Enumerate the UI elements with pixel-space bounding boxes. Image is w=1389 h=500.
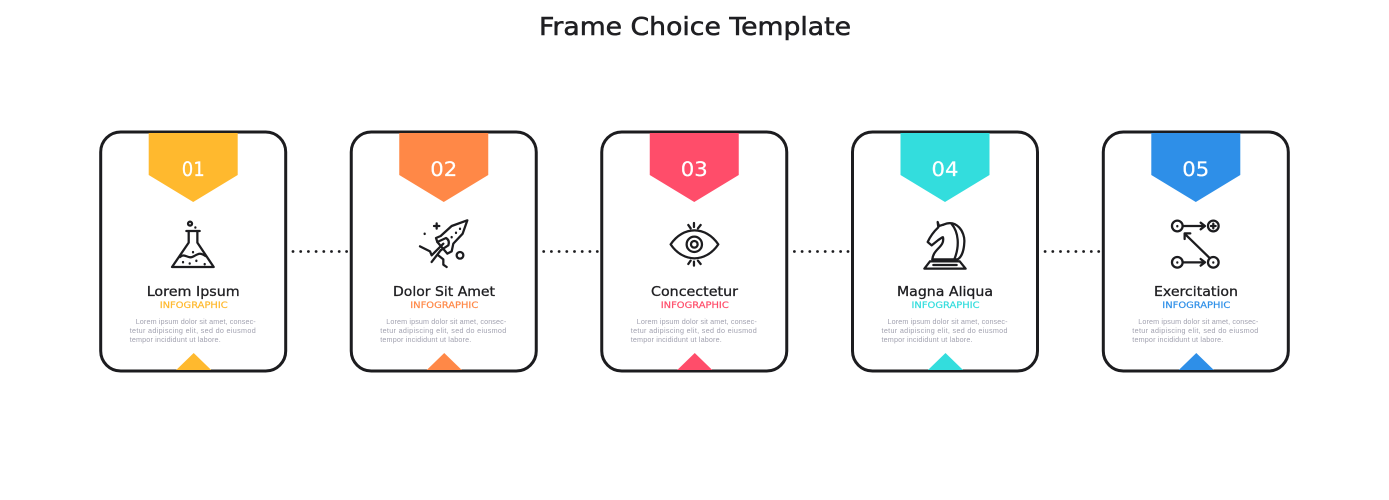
number banner	[149, 133, 238, 202]
icon: eye	[671, 223, 718, 266]
panel: card 02	[351, 132, 536, 371]
body text: Lorem ipsum dolor sit amet, consec-	[386, 317, 507, 326]
icon: path arrows	[1172, 221, 1219, 268]
body text: tetur adipiscing elit, sed do eiusmod	[882, 326, 1008, 335]
card frame	[602, 132, 787, 371]
bottom triangle	[928, 353, 963, 370]
connector 2	[542, 250, 599, 253]
icon: chess knight	[924, 222, 966, 269]
card heading: Magna Aliqua	[897, 284, 993, 300]
body text: tempor incididunt ut labore.	[631, 335, 722, 344]
card subheading: INFOGRAPHIC	[410, 301, 478, 311]
body text: Lorem ipsum dolor sit amet, consec-	[888, 317, 1008, 326]
card heading: Dolor Sit Amet	[393, 284, 495, 300]
panel: card 05	[1103, 132, 1288, 371]
body text	[1132, 317, 1259, 344]
body text: tetur adipiscing elit, sed do eiusmod	[380, 326, 506, 335]
card subheading: INFOGRAPHIC	[661, 301, 729, 311]
body text	[882, 317, 1008, 344]
card frame	[101, 132, 286, 371]
bottom triangle	[176, 353, 211, 370]
number banner	[650, 133, 739, 202]
connector 3	[793, 250, 849, 253]
bottom triangle	[1179, 353, 1214, 370]
body text: Lorem ipsum dolor sit amet, consec-	[1138, 317, 1259, 326]
card heading: Concectetur	[651, 284, 738, 300]
body text: Lorem ipsum dolor sit amet, consec-	[136, 317, 256, 326]
card subheading: INFOGRAPHIC	[912, 301, 980, 311]
card heading: Lorem Ipsum	[147, 284, 240, 300]
panel: card 01	[101, 132, 286, 371]
connector 4	[1044, 250, 1100, 253]
number banner	[399, 133, 488, 202]
body text	[380, 317, 507, 344]
title: Frame Choice Template	[539, 12, 851, 41]
body text: tempor incididunt ut labore.	[130, 335, 221, 344]
body text: tempor incididunt ut labore.	[380, 335, 471, 344]
body text: tempor incididunt ut labore.	[1132, 335, 1223, 344]
body text	[130, 317, 256, 344]
body text	[631, 317, 757, 344]
card frame	[852, 132, 1038, 371]
card frame	[1103, 132, 1288, 371]
card frame	[351, 132, 536, 371]
panel: card 03	[602, 132, 787, 371]
number banner	[1151, 133, 1240, 202]
body text: Lorem ipsum dolor sit amet, consec-	[637, 317, 757, 326]
body text: tetur adipiscing elit, sed do eiusmod	[130, 326, 256, 335]
number: 03	[681, 158, 708, 181]
number: 05	[1182, 158, 1209, 181]
connector 1	[292, 250, 348, 253]
icon: flask	[172, 222, 214, 267]
body text: tetur adipiscing elit, sed do eiusmod	[1132, 326, 1258, 335]
body text: tempor incididunt ut labore.	[882, 335, 972, 344]
bottom triangle	[427, 353, 462, 370]
number: 04	[932, 158, 958, 181]
bottom triangle	[677, 353, 712, 370]
card subheading: INFOGRAPHIC	[160, 301, 228, 311]
card heading: Exercitation	[1154, 284, 1238, 300]
card subheading: INFOGRAPHIC	[1162, 301, 1230, 311]
number: 02	[430, 158, 457, 181]
icon: rocket	[420, 220, 467, 267]
number: 01	[182, 158, 205, 181]
number banner	[900, 133, 990, 202]
panel: card 04	[852, 132, 1038, 371]
body text: tetur adipiscing elit, sed do eiusmod	[631, 326, 757, 335]
